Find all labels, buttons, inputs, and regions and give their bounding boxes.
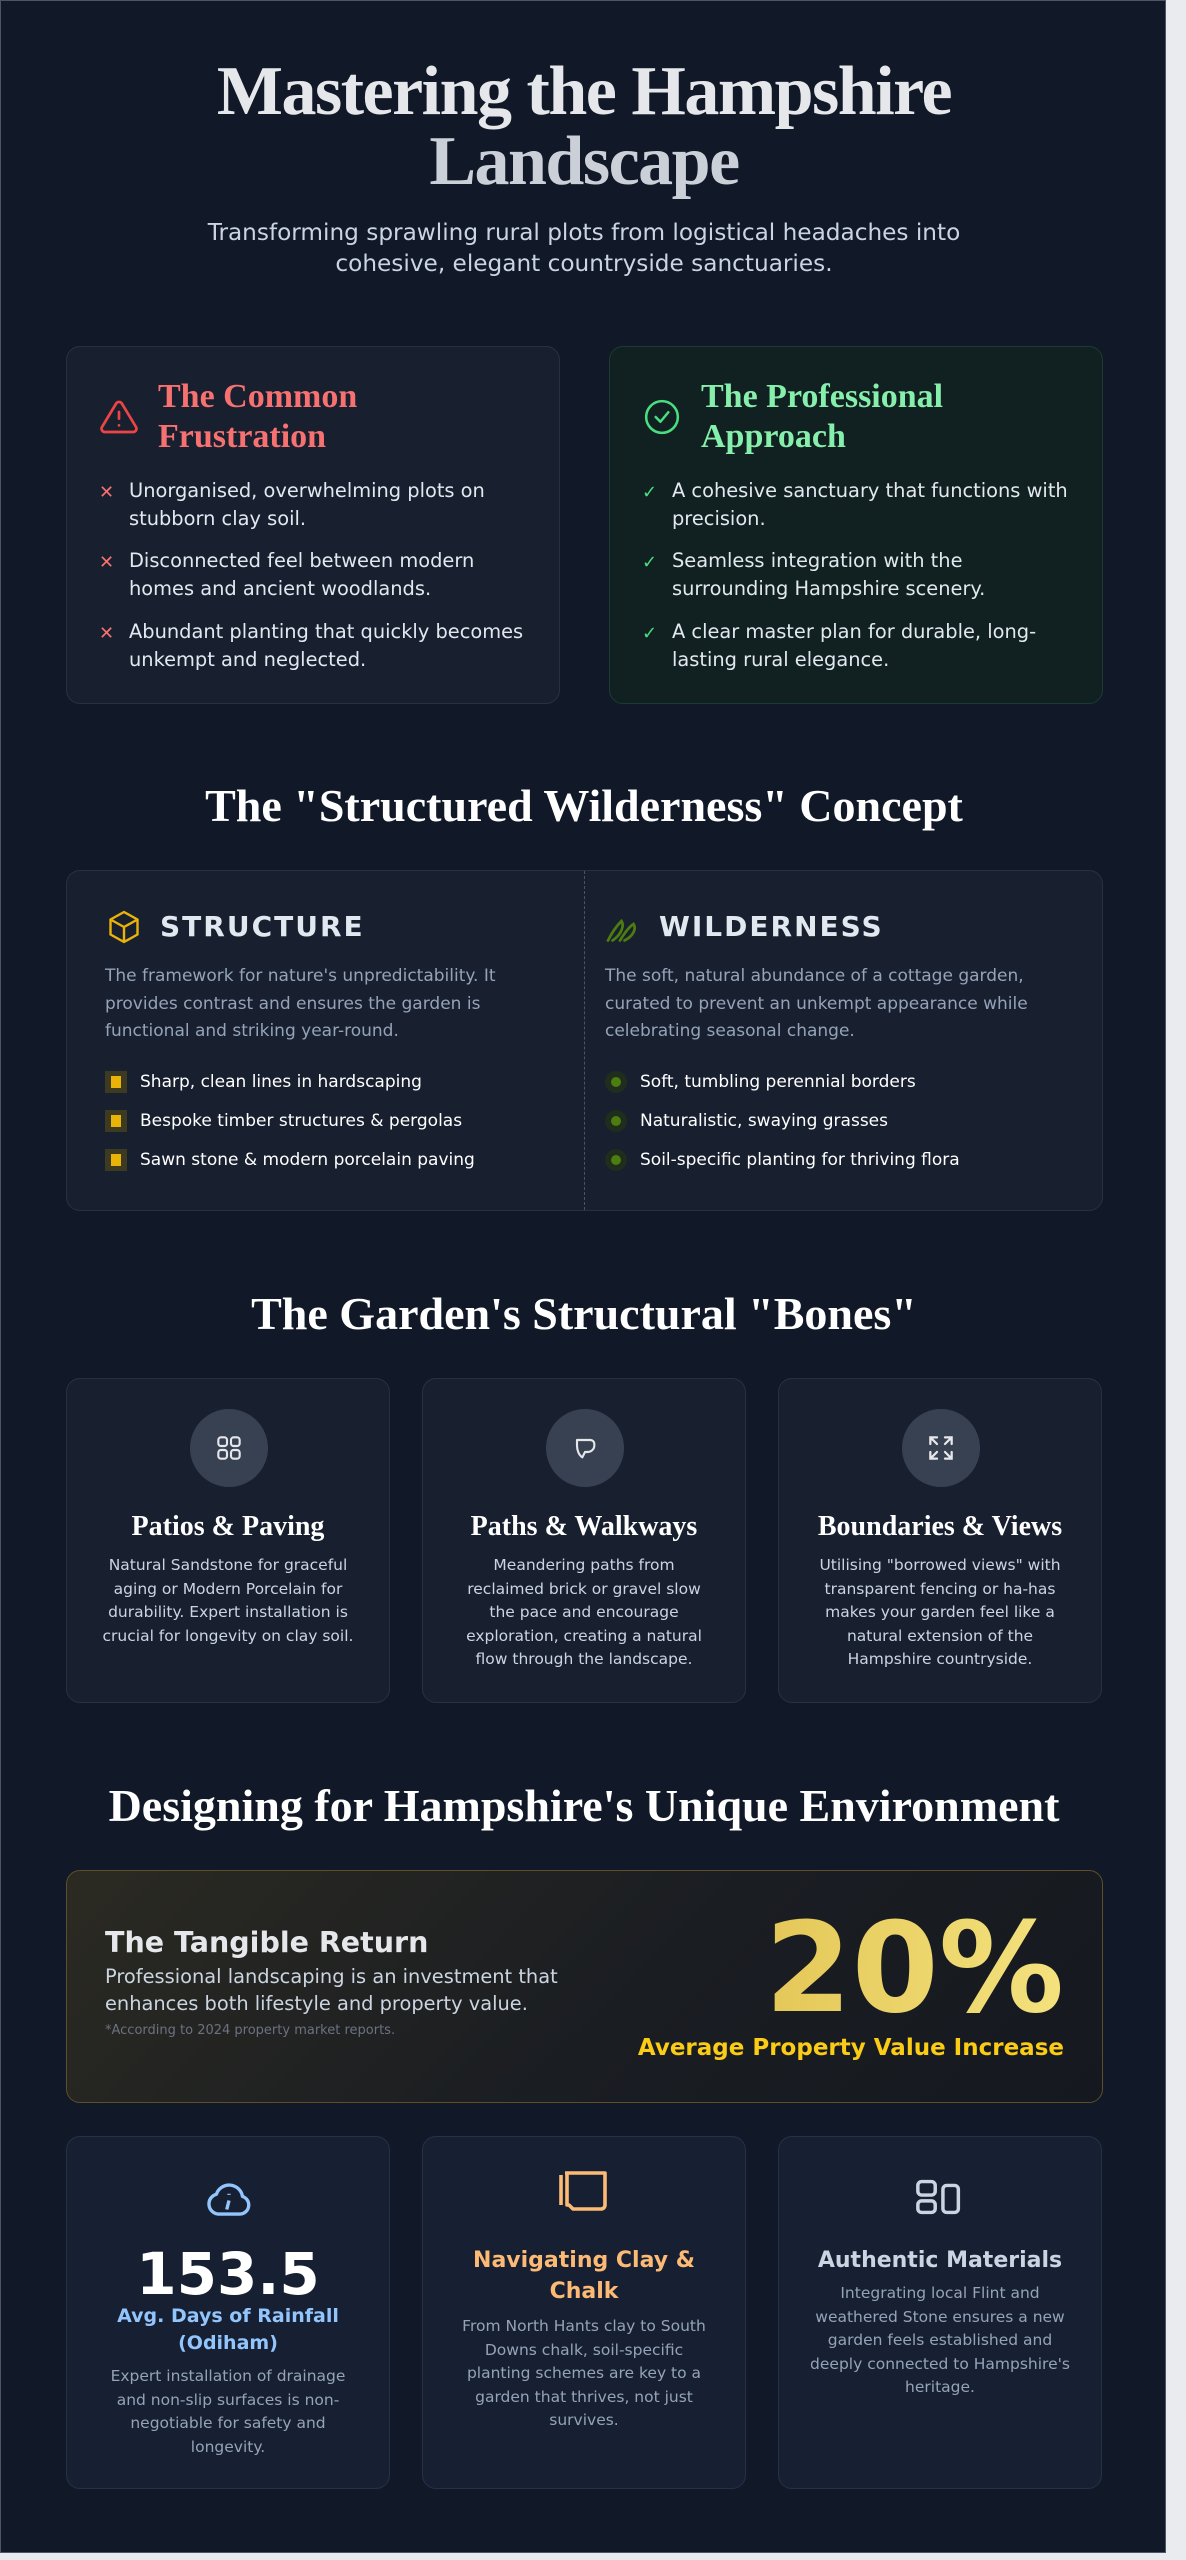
list: frustrations: Disconnected feel between modern homes and ancient woodlands. <box>129 549 474 600</box>
bullet list: Bespoke timber structures & pergolas <box>140 1111 462 1131</box>
icon: check circle <box>644 400 680 434</box>
bullet list: Naturalistic, swaying grasses <box>640 1111 888 1131</box>
card: materials: Authentic Materials <box>818 2248 1062 2273</box>
text block: *According to 2024 property market reports. <box>105 2023 395 2038</box>
text block <box>105 1926 558 2038</box>
heading: Frustration <box>158 418 326 455</box>
icon: grid <box>190 1409 268 1487</box>
bullet list: Sawn stone & modern porcelain paving <box>140 1150 475 1170</box>
bullet list <box>605 1071 960 1171</box>
icon: path <box>546 1409 624 1487</box>
card: materials: Integrating local Flint and weathered Stone ensures a new garden feels established and deeply connected to Hampshire's heritage. <box>810 2284 1070 2396</box>
text block: The Tangible Return <box>105 1926 428 1959</box>
stat: 20%: Average Property Value Increase <box>638 2035 1064 2061</box>
wilderness column <box>604 910 1028 1171</box>
panel: common frustration: ✕ <box>99 482 114 503</box>
text block: Professional landscaping is an investment that enhances both lifestyle and property value. <box>105 1965 558 2015</box>
panel: concept <box>66 870 1103 1211</box>
card: paths: Meandering paths from reclaimed brick or gravel slow the pace and encourage exploration, creating a natural flow through the landscape. <box>466 1556 702 1668</box>
panel: professional approach <box>609 346 1103 704</box>
title: Landscape <box>429 123 739 200</box>
icon: cube <box>109 910 139 944</box>
stat: 20% <box>638 1896 1064 2061</box>
heading: WILDERNESS <box>659 910 884 943</box>
list: approach: A clear master plan for durable, long-lasting rural elegance. <box>672 620 1036 671</box>
bullet list <box>105 1071 475 1171</box>
card: patios <box>66 1378 390 1703</box>
panel: common frustration <box>66 346 560 704</box>
heading: The Professional <box>701 378 943 415</box>
bullet list: Soil-specific planting for thriving flora <box>640 1150 960 1170</box>
card: patios: Natural Sandstone for graceful aging or Modern Porcelain for durability. Expert installation is crucial for longevity on clay soil. <box>103 1556 353 1644</box>
panel: common frustration: ✕ <box>99 623 114 644</box>
icon: blocks <box>916 2180 960 2214</box>
icon: expand <box>902 1409 980 1487</box>
card: paths: Paths & Walkways <box>471 1511 697 1542</box>
card: rainfall: 153.5 <box>136 2240 320 2308</box>
description: The framework for nature's unpredictability. It provides contrast and ensures the garden is functional and striking year-round. <box>105 966 496 1041</box>
heading <box>701 378 943 455</box>
heading: The Common <box>158 378 357 415</box>
list: approach <box>642 479 1068 671</box>
card: boundaries: Utilising "borrowed views" with transparent fencing or ha-has makes your garden feel like a natural extension of the Hampshire countryside. <box>819 1556 1061 1668</box>
card: boundaries: Boundaries & Views <box>818 1511 1062 1542</box>
title <box>217 53 951 200</box>
icon: warning <box>100 400 138 434</box>
heading: bones: The Garden's Structural "Bones" <box>251 1288 917 1339</box>
list: approach: A cohesive sanctuary that functions with precision. <box>672 479 1068 530</box>
card: materials <box>778 2136 1102 2489</box>
card: patios: Patios & Paving <box>132 1511 324 1542</box>
icon: layers <box>559 2171 607 2211</box>
subtitle: Transforming sprawling rural plots from logistical headaches into <box>208 219 960 246</box>
panel: professional approach: ✓ <box>642 623 657 644</box>
subtitle <box>208 219 960 277</box>
card: rainfall <box>66 2136 390 2489</box>
card: clay & chalk: From North Hants clay to South Downs chalk, soil-specific planting schemes are key to a garden that thrives, not just survives. <box>462 2317 706 2429</box>
heading: STRUCTURE <box>160 910 365 943</box>
list: frustrations: Unorganised, overwhelming plots on stubborn clay soil. <box>129 479 485 530</box>
heading <box>158 378 357 455</box>
bullet list: Sharp, clean lines in hardscaping <box>140 1072 422 1092</box>
panel: common frustration: ✕ <box>99 552 114 573</box>
heading: Approach <box>701 418 846 455</box>
panel: professional approach: ✓ <box>642 552 657 573</box>
card: clay & chalk: Navigating Clay & Chalk <box>473 2248 695 2304</box>
card: clay & chalk <box>422 2136 746 2489</box>
stat: 20%: 20% <box>765 1896 1064 2041</box>
panel: professional approach: ✓ <box>642 482 657 503</box>
card: boundaries <box>778 1378 1102 1703</box>
card: rainfall: Expert installation of drainage and non-slip surfaces is non-negotiable for safety and longevity. <box>111 2367 345 2456</box>
heading: environment: Designing for Hampshire's Unique Environment <box>109 1780 1059 1831</box>
panel: tangible return <box>66 1870 1103 2103</box>
structure column <box>104 910 496 1171</box>
title: Mastering the Hampshire <box>217 53 951 130</box>
icon: cloud <box>207 2183 250 2216</box>
heading: structured wilderness: The "Structured Wilderness" Concept <box>205 780 963 831</box>
description: The soft, natural abundance of a cottage garden, curated to prevent an unkempt appearance while celebrating seasonal change. <box>605 966 1028 1041</box>
subtitle: cohesive, elegant countryside sanctuaries. <box>335 250 833 277</box>
list: frustrations <box>99 479 523 671</box>
card: paths <box>422 1378 746 1703</box>
list: frustrations: Abundant planting that quickly becomes unkempt and neglected. <box>129 620 523 671</box>
bullet list: Soft, tumbling perennial borders <box>640 1072 916 1092</box>
card: rainfall: Avg. Days of Rainfall (Odiham) <box>117 2305 339 2354</box>
icon: leaves <box>606 919 636 942</box>
list: approach: Seamless integration with the surrounding Hampshire scenery. <box>672 549 985 600</box>
